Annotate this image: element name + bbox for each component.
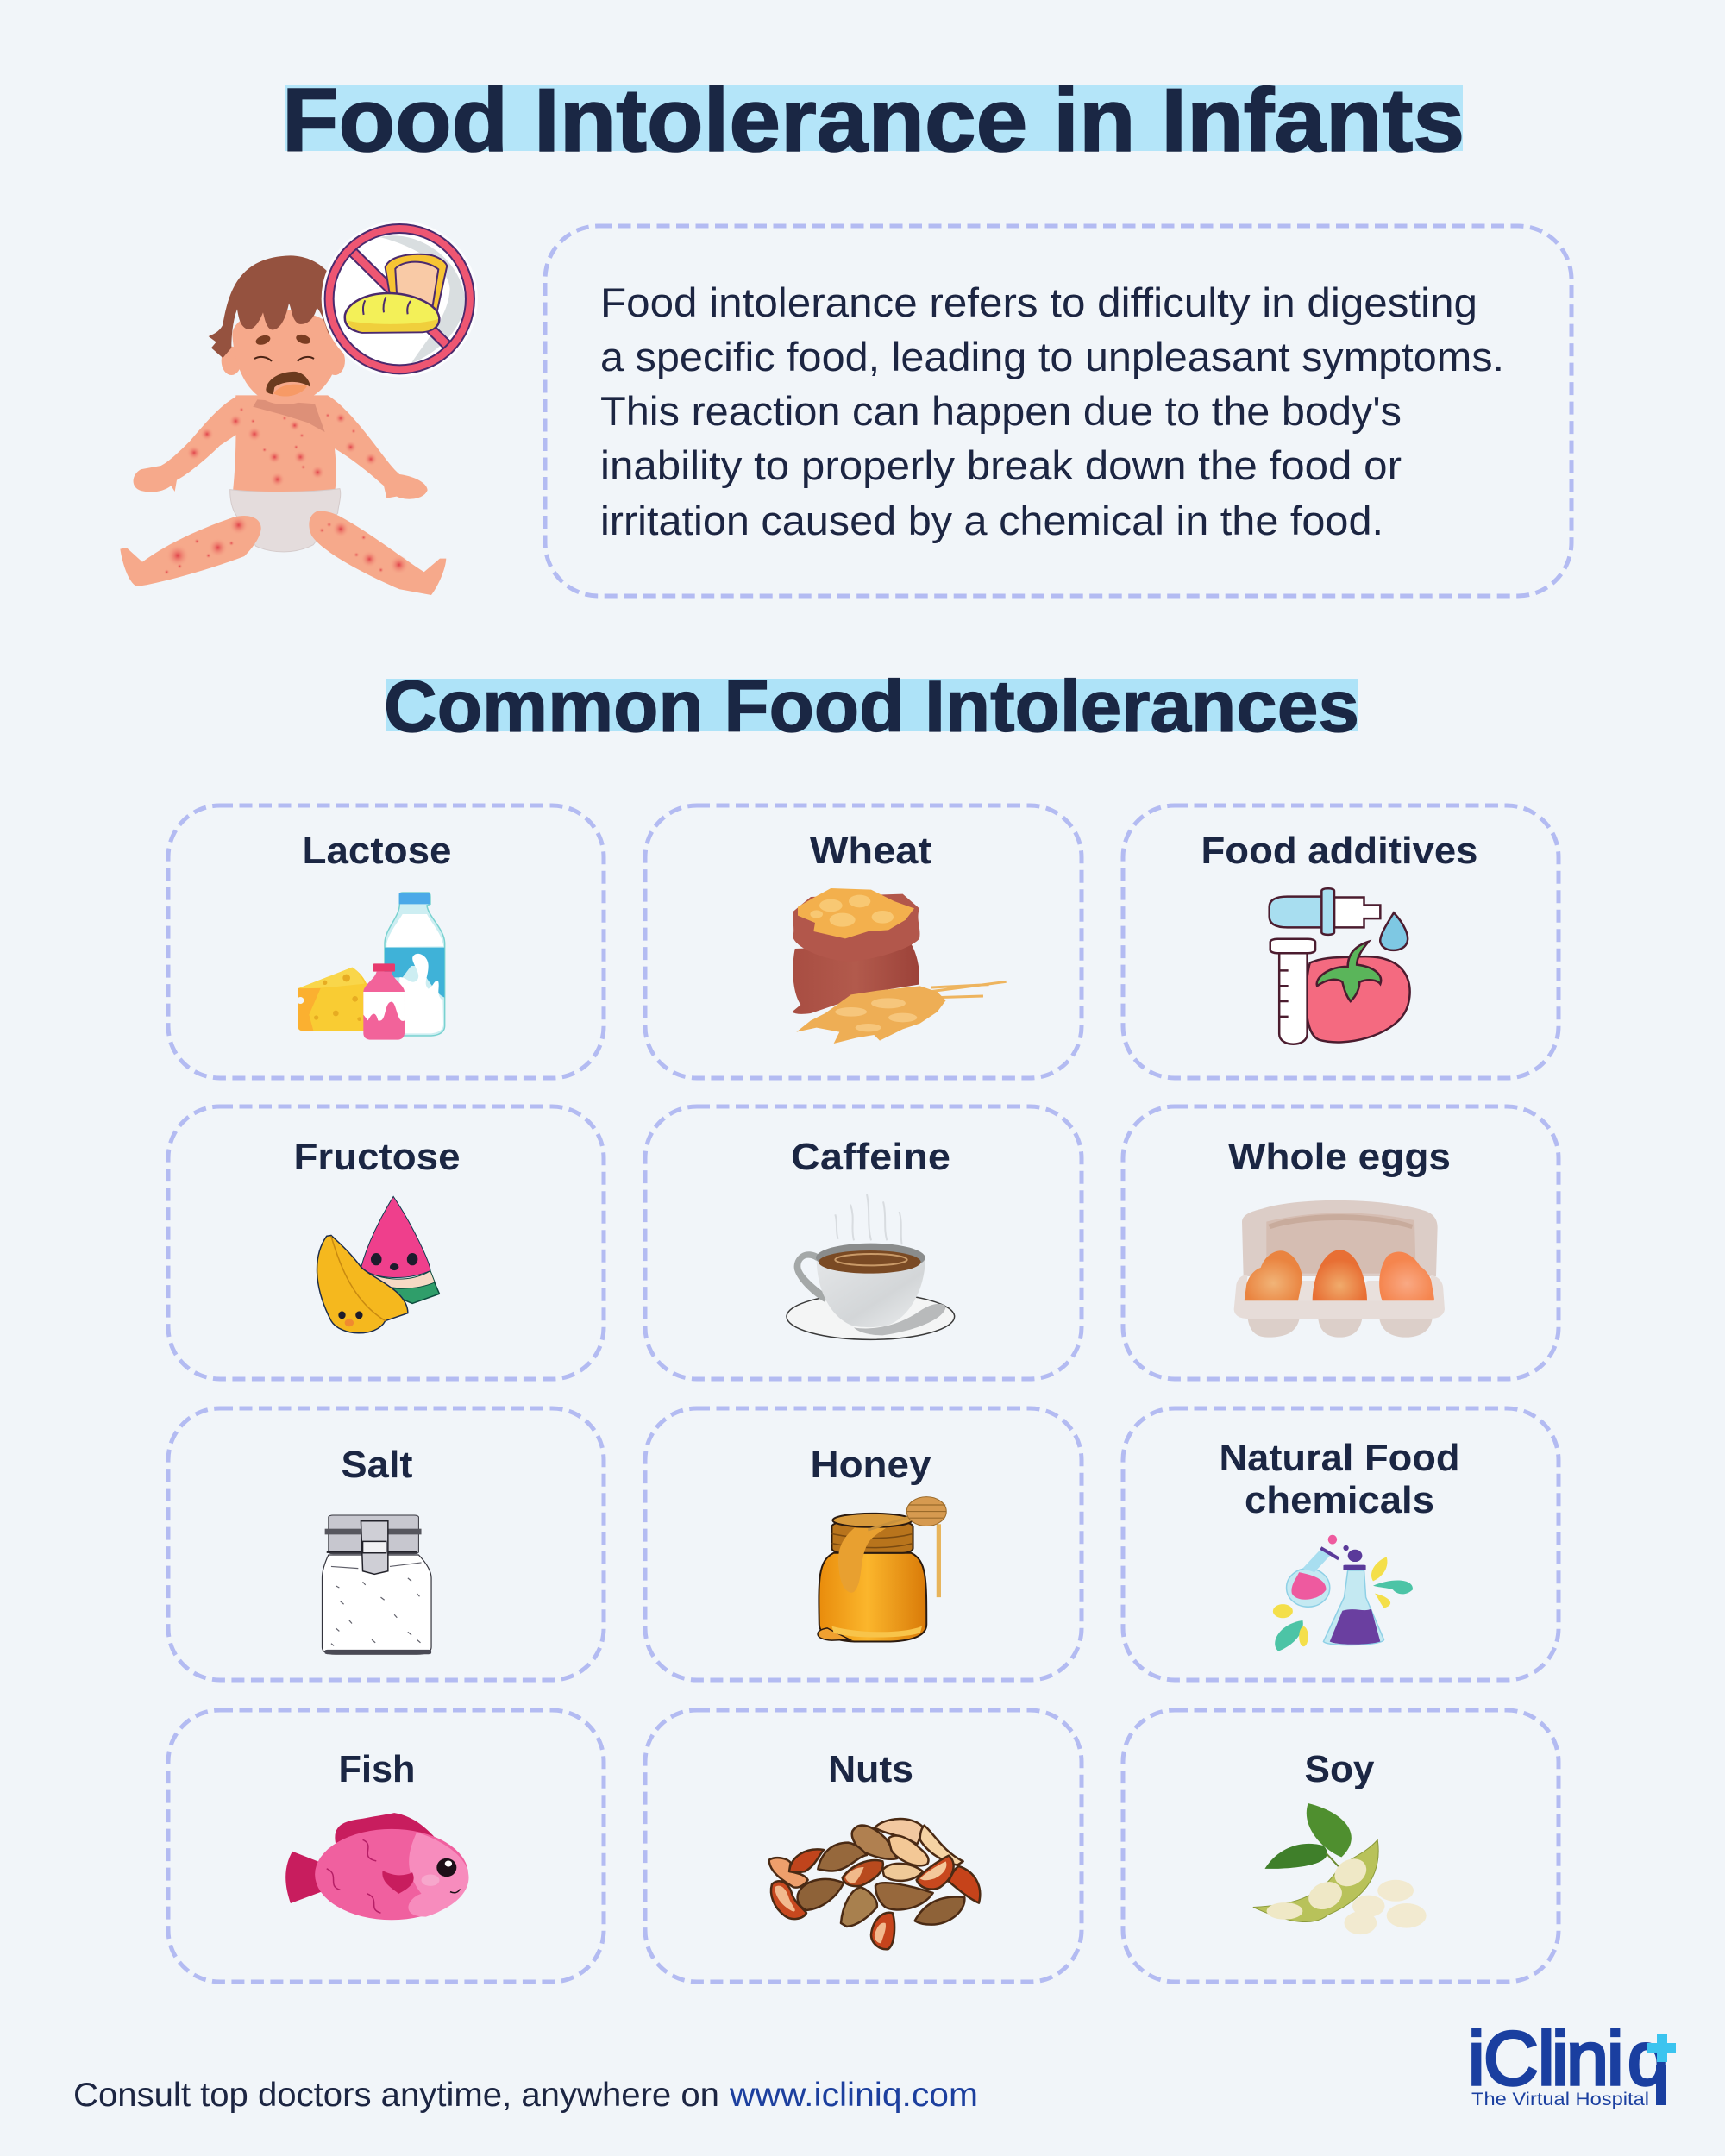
card: Fish [168, 1710, 604, 1982]
intro text: This reaction can happen due to the body's [600, 388, 1402, 434]
label: Caffeine [791, 1136, 950, 1178]
card: Caffeine [645, 1106, 1082, 1379]
diaper [230, 489, 341, 552]
label: chemicals [1245, 1479, 1434, 1521]
icon: dropper, test tube and tomato [1270, 888, 1410, 1044]
no-food sign [322, 221, 478, 377]
toast [386, 254, 447, 312]
neck shadow [253, 399, 325, 432]
intro text: a specific food, leading to unpleasant symptoms. [600, 334, 1504, 379]
card: Lactose [168, 805, 604, 1078]
card: Natural Food chemicals [1123, 1408, 1559, 1680]
icon: soybeans [1253, 1803, 1427, 1934]
baby face [232, 310, 339, 404]
card: Whole eggs [1123, 1106, 1559, 1379]
icon: coffee cup [787, 1194, 955, 1339]
logo plus sign [1647, 2034, 1676, 2062]
mouth [266, 372, 310, 394]
icon: egg carton [1234, 1200, 1445, 1338]
rash spots [164, 407, 409, 575]
card: Fructose [168, 1106, 604, 1379]
label: Natural Food [1220, 1437, 1459, 1479]
label: Wheat [810, 830, 932, 872]
baby left arm [134, 395, 239, 492]
label [1220, 1437, 1459, 1521]
label: Nuts [828, 1748, 913, 1790]
card: Honey [645, 1408, 1082, 1680]
logo: iCliniq: iCliniq [1468, 2015, 1670, 2101]
icon: milk, cheese and yogurt [297, 893, 445, 1040]
label: Soy [1304, 1748, 1375, 1790]
baby right leg [309, 511, 446, 595]
baby right arm [328, 395, 428, 499]
label: Honey [811, 1444, 932, 1486]
label: Fish [338, 1748, 416, 1790]
icon: nuts pile [769, 1819, 980, 1949]
card: Nuts [645, 1710, 1082, 1982]
intro panel [545, 226, 1571, 596]
intro text [600, 279, 1504, 543]
icon: flasks [1273, 1535, 1413, 1651]
footer text: www.icliniq.com [729, 2077, 978, 2114]
label: Salt [342, 1444, 413, 1486]
baby torso [233, 395, 336, 492]
illustration: baby with rash and no-bread sign [120, 221, 478, 595]
label: Fructose [293, 1136, 461, 1178]
footer text [73, 2077, 978, 2114]
label: Food additives [1201, 830, 1478, 872]
baby ears [222, 347, 242, 375]
label: Lactose [302, 830, 452, 872]
intro text: Food intolerance refers to difficulty in digesting [600, 279, 1477, 325]
closed eyes [254, 357, 314, 361]
icon: banana and watermelon [317, 1196, 439, 1333]
intro text: irritation caused by a chemical in the food. [600, 498, 1383, 543]
icon: fish [285, 1813, 469, 1920]
card: Salt [168, 1408, 604, 1680]
bread loaf [345, 293, 439, 333]
logo tagline: The Virtual Hospital [1471, 2090, 1649, 2109]
eyebrows [254, 334, 272, 347]
icon: honey jar [818, 1497, 946, 1641]
label: Whole eggs [1228, 1136, 1451, 1178]
icon: salt jar [322, 1515, 431, 1654]
card: Wheat [645, 805, 1082, 1078]
baby hair [209, 255, 339, 358]
section heading: Common Food Intolerances [384, 666, 1359, 747]
title: Food Intolerance in Infants [282, 71, 1465, 171]
card: Soy [1123, 1710, 1559, 1982]
icon: wheat sack [792, 888, 1007, 1044]
intro text: inability to properly break down the food or [600, 442, 1402, 488]
baby left leg [120, 516, 261, 586]
footer text: Consult top doctors anytime, anywhere on [73, 2077, 719, 2114]
card: Food additives [1123, 805, 1559, 1078]
